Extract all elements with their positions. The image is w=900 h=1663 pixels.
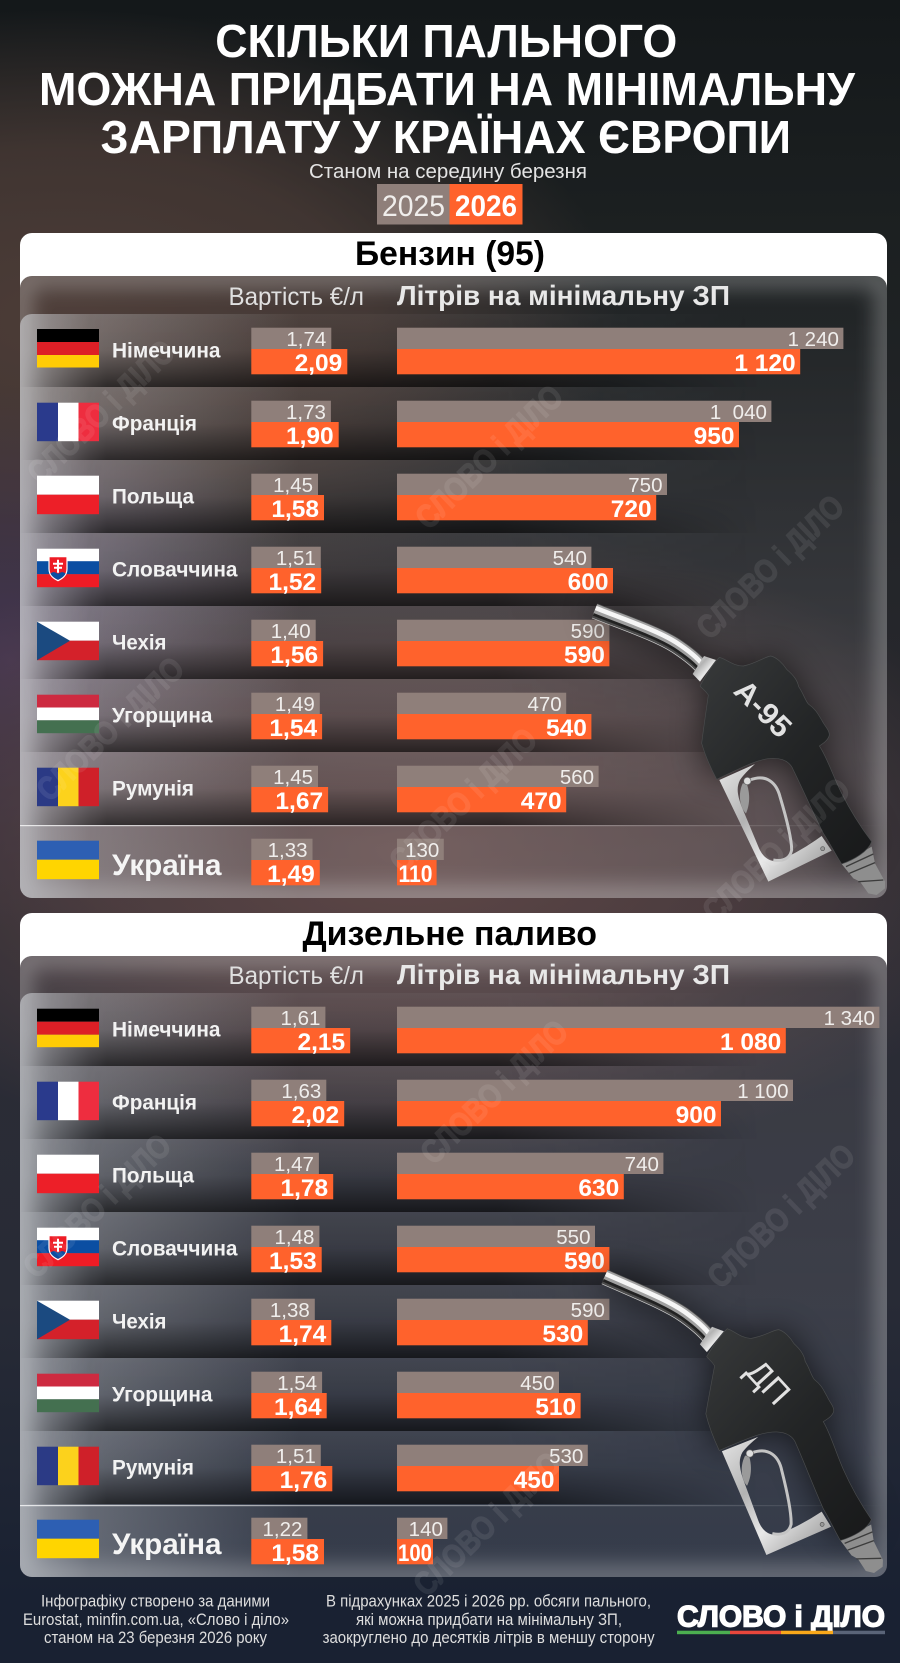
price bars: 1,74 [286, 328, 326, 351]
country name: Німеччина [112, 338, 222, 362]
litres bars: 470 [527, 693, 562, 716]
litres bars: 590 [564, 642, 605, 669]
flag: Poland [37, 1155, 99, 1193]
country name: Словаччина [112, 1236, 239, 1260]
price bars: 1,51 [276, 547, 316, 570]
price bars: 1,40 [271, 620, 311, 643]
country name: Україна [112, 1528, 222, 1561]
litres bars: 140 [409, 1518, 443, 1541]
litres bars: 630 [578, 1175, 619, 1202]
litres bars: 750 [628, 474, 662, 497]
country name: Польща [112, 484, 195, 508]
price bars: 1,45 [273, 474, 313, 497]
price bars [251, 547, 321, 596]
price bars: 1,45 [273, 766, 313, 789]
heading: petrol: Бензин (95) [355, 235, 545, 273]
icon: diesel fuel nozzle: ДП [738, 1353, 797, 1412]
title: МОЖНА ПРИДБАТИ НА МІНІМАЛЬНУ [39, 63, 856, 115]
litres bars: 900 [676, 1102, 716, 1129]
row: Словаччина [26, 546, 702, 606]
country name: Німеччина [112, 1018, 222, 1042]
price bars: 1,63 [281, 1080, 321, 1103]
litres bars [397, 401, 771, 450]
footer: method note: В підрахунках 2025 і 2026 рр. обсяги пального, [326, 1592, 651, 1610]
column heading: litres: Літрів на мінімальну ЗП [397, 959, 730, 990]
litres bars: 530 [549, 1445, 583, 1468]
price bars [251, 1299, 331, 1348]
row: Німеччина [27, 328, 844, 387]
litres bars: 530 [542, 1321, 583, 1348]
litres bars: 1 240 [788, 328, 839, 351]
price bars: 1,38 [270, 1299, 310, 1322]
row: Чехія [27, 1298, 701, 1358]
price bars [251, 1518, 324, 1567]
footer: method note: заокруглено до десятків літрів в меншу сторону [323, 1629, 655, 1647]
icon: A-95 fuel nozzle: А-95 [727, 674, 798, 744]
litres bars [397, 1080, 793, 1129]
price bars: 1,58 [271, 496, 319, 523]
watermarks: СЛОВО і ДІЛО [700, 1136, 862, 1295]
litres bars [397, 1372, 581, 1421]
flag: Ukraine [37, 1520, 99, 1558]
column heading: cost: Вартість €/л [228, 283, 364, 311]
country name: Чехія [112, 1310, 166, 1334]
watermarks: СЛОВО і ДІЛО [20, 332, 182, 491]
flag: Poland [37, 476, 99, 514]
litres bars: 590 [571, 620, 605, 643]
litres bars [397, 1007, 879, 1056]
flag: Romania [37, 768, 99, 806]
price bars: 1,51 [276, 1445, 316, 1468]
watermarks: СЛОВО і ДІЛО [382, 720, 544, 879]
flag: Czechia [37, 622, 99, 660]
footer: sources: Eurostat, minfin.com.ua, «Слово і діло» [23, 1611, 289, 1629]
litres bars: 550 [556, 1226, 590, 1249]
title [39, 15, 856, 163]
litres bars [397, 1153, 663, 1202]
litres bars [397, 1226, 609, 1275]
litres bars [397, 1299, 609, 1348]
price bars: 1,47 [274, 1153, 314, 1176]
country name: Польща [112, 1164, 195, 1188]
row: Угорщина [27, 1372, 704, 1431]
price bars: 1,49 [267, 861, 315, 888]
country name: Франція [112, 1090, 197, 1114]
country name: Словаччина [112, 558, 239, 582]
row: Чехія [26, 620, 696, 679]
price bars: 1,90 [286, 423, 334, 450]
litres bars: 130 [405, 839, 439, 862]
watermarks: СЛОВО і ДІЛО [406, 1444, 568, 1603]
flag: Slovakia [37, 549, 99, 587]
litres bars: 590 [564, 1248, 605, 1275]
column heading: cost: Вартість €/л [228, 962, 364, 990]
heading: diesel: Дизельне паливо [302, 915, 597, 953]
country name: Україна [112, 849, 222, 882]
litres bars [397, 547, 613, 596]
flag: Hungary [37, 1374, 99, 1412]
country name: Угорщина [112, 704, 214, 728]
subtitle: Станом на середину березня [309, 160, 587, 183]
litres bars: 950 [694, 423, 734, 450]
price bars: 2,15 [298, 1029, 345, 1056]
litres bars [397, 328, 843, 377]
litres bars: 470 [521, 788, 562, 815]
footer: method note [323, 1592, 655, 1647]
panel: petrol [20, 233, 887, 898]
watermarks: СЛОВО і ДІЛО [408, 377, 570, 536]
price bars [251, 693, 322, 742]
watermarks: СЛОВО і ДІЛО [695, 770, 857, 929]
litres bars: 450 [514, 1467, 554, 1494]
column heading: litres: Літрів на мінімальну ЗП [397, 280, 730, 311]
legend: 2026 [455, 190, 517, 223]
litres bars [397, 1518, 447, 1567]
litres bars: 1 120 [734, 350, 796, 377]
row: Угорщина [26, 692, 704, 752]
row: Україна [37, 1518, 447, 1567]
title: СКІЛЬКИ ПАЛЬНОГО [215, 15, 677, 67]
watermarks: СЛОВО і ДІЛО [29, 649, 191, 808]
flag: Slovakia [37, 1228, 99, 1266]
price bars [251, 401, 339, 450]
price bars [251, 620, 323, 669]
flag: Germany [37, 329, 99, 368]
flag: Hungary [37, 695, 99, 733]
litres bars: 100 [398, 1540, 432, 1567]
price bars: 2,02 [292, 1102, 339, 1129]
price bars: 1,54 [277, 1372, 317, 1395]
price bars [251, 1080, 344, 1129]
price bars: 1,22 [262, 1518, 302, 1541]
litres bars: 740 [625, 1153, 659, 1176]
flag: Romania [37, 1447, 99, 1485]
panel header: petrol [20, 233, 887, 288]
price bars [251, 1445, 332, 1494]
price bars [251, 1153, 333, 1202]
price bars: 1,67 [275, 788, 323, 815]
litres bars: 1 340 [824, 1007, 875, 1030]
country name: Угорщина [112, 1382, 214, 1406]
litres bars: 560 [560, 766, 594, 789]
watermarks: СЛОВО і ДІЛО [689, 487, 851, 646]
flag: France [37, 403, 99, 441]
price bars: 1,74 [279, 1321, 327, 1348]
litres bars [397, 766, 599, 815]
price bars: 1,58 [271, 1540, 319, 1567]
flag: Ukraine [37, 841, 99, 879]
watermarks: СЛОВО і ДІЛО [16, 1126, 178, 1285]
litres bars: 540 [553, 547, 587, 570]
litres bars: 1 100 [737, 1080, 788, 1103]
litres bars [397, 1445, 588, 1494]
footer: sources: станом на 23 березня 2026 року [44, 1629, 268, 1647]
litres bars: 510 [535, 1394, 576, 1421]
price bars: 1,73 [286, 401, 326, 424]
watermarks [16, 332, 862, 1603]
price bars: 1,49 [275, 693, 315, 716]
litres bars: 590 [571, 1299, 605, 1322]
legend [377, 184, 522, 224]
flag: France [37, 1082, 99, 1120]
litres bars [397, 839, 444, 888]
price bars: 1,56 [270, 642, 318, 669]
country name: Румунія [112, 776, 194, 800]
litres bars: 720 [611, 496, 652, 523]
logo: СЛОВО і ДІЛО [677, 1601, 885, 1634]
icon: A-95 fuel nozzle [592, 604, 885, 895]
price bars: 1,53 [269, 1248, 317, 1275]
row: Румунія [26, 1444, 710, 1504]
row: Польща [26, 474, 694, 533]
litres bars: 1 080 [720, 1029, 781, 1056]
price bars [251, 766, 328, 815]
row: Україна [37, 839, 444, 888]
litres bars: 1 040 [710, 401, 767, 424]
flag: Germany [37, 1009, 99, 1047]
litres bars: 540 [546, 715, 587, 742]
footer: sources: Інфографіку створено за даними [41, 1592, 270, 1610]
row: Словаччина [27, 1226, 708, 1285]
country name: Румунія [112, 1456, 194, 1480]
price bars: 2,09 [295, 350, 342, 377]
country name: Франція [112, 412, 197, 436]
footer: method note: які можна придбати на мінімальну ЗП, [356, 1611, 622, 1629]
price bars: 1,78 [281, 1175, 328, 1202]
watermarks: СЛОВО і ДІЛО [413, 1012, 575, 1171]
litres bars [397, 620, 609, 669]
litres bars: 450 [520, 1372, 554, 1395]
price bars: 1,33 [268, 839, 308, 862]
price bars [251, 839, 320, 888]
price bars: 1,76 [280, 1467, 327, 1494]
price bars [251, 1372, 327, 1421]
price bars [251, 1007, 350, 1056]
row: Румунія [26, 766, 720, 825]
price bars: 1,54 [269, 715, 317, 742]
icon: diesel fuel nozzle [589, 1270, 895, 1573]
title: ЗАРПЛАТУ У КРАЇНАХ ЄВРОПИ [100, 111, 791, 163]
legend: 2025 [382, 190, 445, 223]
price bars [251, 1226, 322, 1275]
country name: Чехія [112, 630, 166, 654]
price bars [251, 474, 324, 523]
panel header: diesel [20, 913, 887, 968]
footer: sources [23, 1592, 289, 1647]
row: Франція [27, 1080, 793, 1139]
row: Польща [27, 1152, 708, 1212]
row: Німеччина [27, 1006, 880, 1066]
price bars [251, 328, 347, 377]
row: Франція [27, 400, 772, 460]
flag: Czechia [37, 1301, 99, 1339]
litres bars [397, 693, 591, 742]
panel: diesel [20, 913, 887, 1577]
price bars: 1,52 [269, 569, 316, 596]
price bars: 1,64 [274, 1394, 322, 1421]
litres bars: 600 [568, 569, 608, 596]
litres bars: 110 [398, 861, 432, 888]
litres bars [397, 474, 667, 523]
price bars: 1,48 [274, 1226, 314, 1249]
price bars: 1,61 [280, 1007, 320, 1030]
